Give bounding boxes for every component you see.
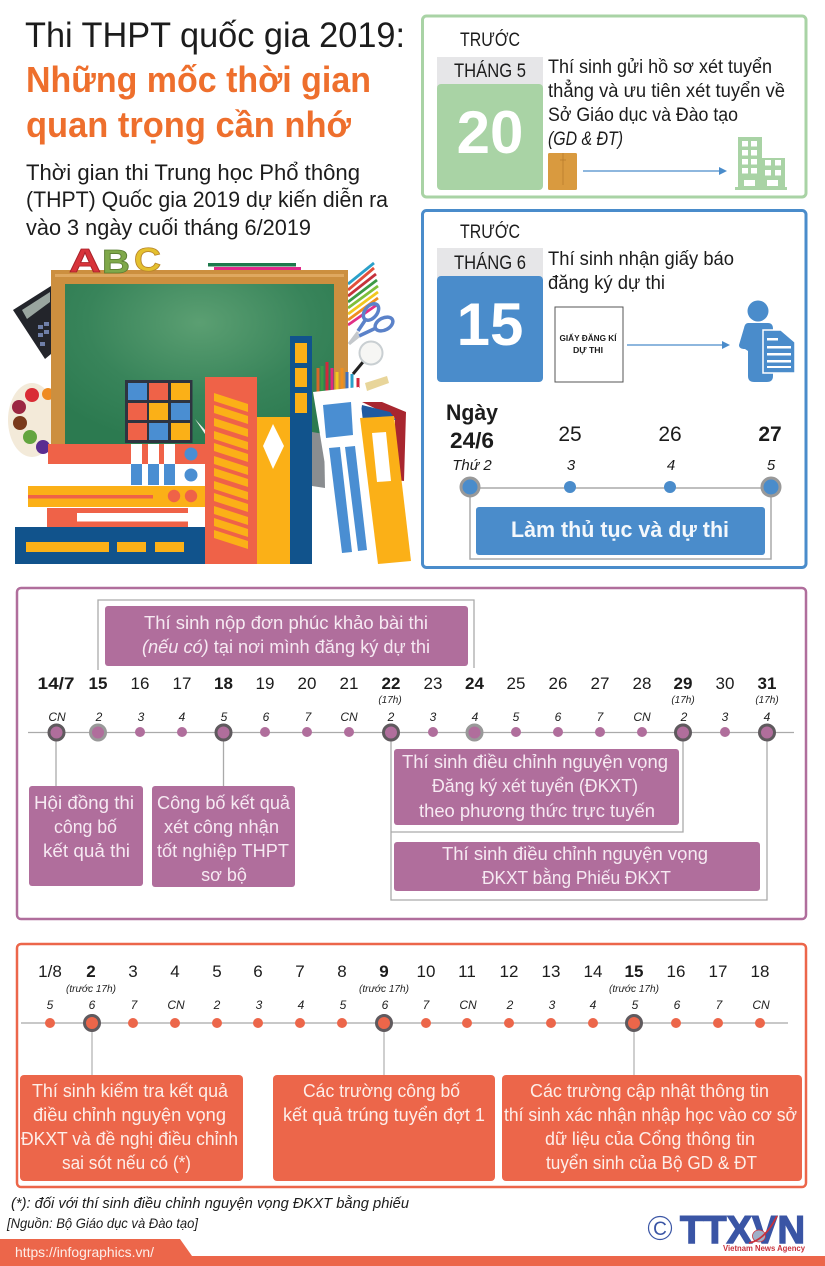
August weekdays: 3 xyxy=(256,998,263,1012)
dates 25 to 27: 5 xyxy=(767,457,776,474)
July weekdays: 6 xyxy=(263,710,270,724)
label: before: TRƯỚC xyxy=(460,29,520,51)
July dates: 26 xyxy=(549,674,567,693)
text: receive notice: Thí sinh nhận giấy báo xyxy=(548,249,734,270)
connector lines xyxy=(21,1023,788,1075)
August dates: 12 xyxy=(500,962,518,981)
July weekdays: 2 xyxy=(95,710,103,724)
July weekdays: 3 xyxy=(138,710,145,724)
books lying flat xyxy=(15,444,205,564)
icon: coloured pencils xyxy=(348,263,378,325)
August weekdays: 6 xyxy=(674,998,681,1012)
date: 24/6: Thứ 2 xyxy=(452,457,492,474)
icon: colour cube xyxy=(125,380,192,443)
callout: paper form adjustment: ĐKXT bằng Phiếu ĐKXT xyxy=(482,867,671,888)
icon: magnifier xyxy=(353,342,382,374)
callout: preliminary graduation xyxy=(152,786,295,887)
callout: online adjustment: Đăng ký xét tuyển (ĐKXT) xyxy=(432,776,638,796)
icon: ABC letters: A xyxy=(69,242,101,279)
blackboard xyxy=(51,270,348,460)
callout: check adjustment results: ĐKXT và đề nghị điều chỉnh xyxy=(21,1129,238,1149)
July weekdays xyxy=(48,710,771,724)
callout: review request: (nếu có) tại nơi mình đăng ký dự thi xyxy=(142,637,430,657)
exam days timeline xyxy=(446,400,782,559)
August weekdays: CN xyxy=(752,998,770,1012)
footer band with URL: https://infographics.vn/ xyxy=(15,1244,154,1260)
July dates: (17h) xyxy=(378,695,402,706)
July dates: 18 xyxy=(214,674,233,693)
August weekdays: 5 xyxy=(340,998,347,1012)
July weekdays: 7 xyxy=(597,710,605,724)
upright books xyxy=(205,336,312,564)
dates 25 to 27: 27 xyxy=(758,423,782,446)
date tile: 15 June: THÁNG 6 xyxy=(454,253,526,274)
July weekdays: 4 xyxy=(179,710,186,724)
icon: ruler xyxy=(365,376,389,391)
August weekdays: 5 xyxy=(632,998,639,1012)
orange headline: quan trọng cần nhớ xyxy=(26,104,351,145)
July dates: 16 xyxy=(131,674,149,693)
July weekdays: CN xyxy=(48,710,66,724)
August dates: 16 xyxy=(667,962,685,981)
July weekdays: 2 xyxy=(680,710,688,724)
July dates xyxy=(38,674,779,706)
August weekdays: 6 xyxy=(89,998,96,1012)
date: 24/6: Ngày xyxy=(446,400,499,425)
callout: exam procedure xyxy=(476,507,765,555)
August dates: 9 xyxy=(379,962,389,981)
text: receive notice: đăng ký dự thi xyxy=(548,273,665,294)
August weekdays: 6 xyxy=(382,998,389,1012)
August timeline dots xyxy=(45,1016,765,1030)
August weekdays xyxy=(47,998,770,1012)
title block xyxy=(25,16,405,240)
callout: online adjustment xyxy=(394,749,679,825)
August weekdays: 2 xyxy=(213,998,221,1012)
text: send application: Thí sinh gửi hồ sơ xét tuyển xyxy=(548,57,772,78)
text: send application xyxy=(548,57,785,150)
date: 24/6 xyxy=(446,400,499,474)
August dates xyxy=(38,962,769,995)
July weekdays: 7 xyxy=(305,710,313,724)
July weekdays: 4 xyxy=(764,710,771,724)
callout: round 1 results xyxy=(273,1075,495,1181)
callout: preliminary graduation: sơ bộ xyxy=(201,865,247,885)
July weekdays: CN xyxy=(340,710,358,724)
intro text: Thời gian thi Trung học Phổ thông xyxy=(26,160,360,185)
title line: Thi THPT quốc gia 2019: xyxy=(25,16,405,55)
callout: check adjustment results: điều chỉnh nguyện vọng xyxy=(33,1105,226,1125)
icon: stacked books behind xyxy=(312,402,406,488)
icon: paint palette xyxy=(8,383,56,457)
August weekdays: 7 xyxy=(716,998,724,1012)
July weekdays: 3 xyxy=(430,710,437,724)
July dates: 14/7 xyxy=(38,674,74,693)
orange headline: Những mốc thời gian xyxy=(26,59,371,100)
August weekdays: 7 xyxy=(131,998,139,1012)
August weekdays: CN xyxy=(167,998,185,1012)
July timeline dots xyxy=(49,725,774,740)
July weekdays: 4 xyxy=(472,710,479,724)
July dates: 15 xyxy=(89,674,107,693)
text: send application: Sở Giáo dục và Đào tạo xyxy=(548,105,738,126)
icon: registration paper xyxy=(555,307,623,382)
August dates: (trước 17h) xyxy=(609,984,659,995)
orange headline xyxy=(26,59,371,145)
August dates: 15 xyxy=(625,962,643,981)
panel: August timeline xyxy=(17,944,806,1187)
August weekdays: 5 xyxy=(47,998,54,1012)
July dates: 28 xyxy=(633,674,651,693)
August dates: 2 xyxy=(86,962,96,981)
logo: TTXVN: C xyxy=(653,1219,667,1240)
July dates: 21 xyxy=(340,674,358,693)
icon: pencil cup xyxy=(318,362,358,392)
July dates: 24 xyxy=(465,674,484,693)
callout: review request xyxy=(105,606,468,666)
August weekdays: CN xyxy=(459,998,477,1012)
August dates: 7 xyxy=(295,962,305,981)
panel: before May 20 xyxy=(422,16,806,197)
intro text: (THPT) Quốc gia 2019 dự kiến diễn ra xyxy=(26,187,389,212)
August dates: 10 xyxy=(417,962,435,981)
icon: building xyxy=(735,137,787,190)
July dates: 22 xyxy=(382,674,400,693)
arrow xyxy=(627,341,730,349)
dates 25 to 27: 3 xyxy=(567,457,576,474)
July dates: 30 xyxy=(716,674,734,693)
text: send application: thẳng và ưu tiên xét tuyển về xyxy=(548,80,785,102)
August weekdays: 4 xyxy=(590,998,597,1012)
text: send application: (GD & ĐT) xyxy=(548,129,623,150)
July weekdays: 5 xyxy=(513,710,520,724)
timeline dots xyxy=(461,478,780,496)
callout: round 1 results: kết quả trúng tuyển đợt 1 xyxy=(283,1105,485,1125)
callout: paper form adjustment xyxy=(394,842,760,891)
callout: round 1 results: Các trường công bố xyxy=(303,1081,460,1101)
August dates: 11 xyxy=(458,962,476,981)
icon: envelope xyxy=(548,153,577,190)
dates 25 to 27: 25 xyxy=(558,423,582,446)
label: before: TRƯỚC xyxy=(460,221,520,243)
connector lines xyxy=(28,600,794,900)
callout: paper form adjustment: Thí sinh điều chỉnh nguyện vọng xyxy=(442,844,708,864)
callout: results announced: công bố xyxy=(54,817,117,837)
July weekdays: 5 xyxy=(221,710,228,724)
panel: July timeline xyxy=(17,588,806,919)
July dates: (17h) xyxy=(671,695,695,706)
logo: TTXVN: TTXVN xyxy=(680,1209,805,1252)
July weekdays: CN xyxy=(633,710,651,724)
July dates: 25 xyxy=(507,674,525,693)
leaning books xyxy=(313,387,411,564)
callout: check adjustment results xyxy=(20,1075,243,1181)
callout: results announced: kết quả thi xyxy=(43,841,130,861)
July dates: 17 xyxy=(173,674,191,693)
callout: exam procedure: Làm thủ tục và dự thi xyxy=(511,517,729,542)
July dates: 31 xyxy=(758,674,776,693)
source: [Nguồn: Bộ Giáo dục và Đào tạo] xyxy=(6,1215,199,1231)
July dates: 19 xyxy=(256,674,274,693)
dates 25 to 27: 26 xyxy=(658,423,682,446)
July weekdays: 6 xyxy=(555,710,562,724)
callout: check adjustment results: sai sót nếu có (*) xyxy=(62,1153,191,1173)
callout: update admissions data: thí sinh xác nhận nhập học vào cơ sở xyxy=(504,1105,797,1125)
date tile: 20 May xyxy=(437,57,543,190)
date tile: 15 June: 15 xyxy=(457,291,523,358)
icon: calculator xyxy=(13,286,51,359)
July dates: 29 xyxy=(674,674,692,693)
August weekdays: 7 xyxy=(423,998,431,1012)
icon: person with document xyxy=(739,300,795,382)
July dates: 20 xyxy=(298,674,316,693)
intro text xyxy=(26,160,389,240)
callout: results announced xyxy=(29,786,143,886)
callout: results announced: Hội đồng thi xyxy=(34,793,134,813)
August dates: 1/8 xyxy=(38,962,62,981)
July dates: 27 xyxy=(591,674,609,693)
callout: online adjustment: Thí sinh điều chỉnh nguyện vọng xyxy=(402,752,668,772)
illustration: blackboard, books and school supplies xyxy=(8,241,411,564)
date tile: 20 May: 20 xyxy=(457,99,523,166)
icon: ABC letters xyxy=(69,241,161,280)
July dates: (17h) xyxy=(755,695,779,706)
callout: preliminary graduation: tốt nghiệp THPT xyxy=(157,841,289,861)
callout: preliminary graduation: xét công nhận xyxy=(164,817,279,837)
callout: update admissions data xyxy=(502,1075,802,1181)
August dates: 4 xyxy=(170,962,180,981)
icon: ABC letters: B xyxy=(102,243,130,280)
panel: before June 15 and exam days xyxy=(422,210,806,568)
August weekdays: 4 xyxy=(298,998,305,1012)
date tile: 20 May: THÁNG 5 xyxy=(454,61,526,82)
arrow xyxy=(583,167,727,175)
icon: registration paper: DỰ THI xyxy=(573,346,603,355)
callout: update admissions data: dữ liệu của Cổng thông tin xyxy=(545,1129,755,1149)
August dates: 6 xyxy=(253,962,263,981)
dates 25 to 27: 4 xyxy=(667,457,675,474)
August dates: 8 xyxy=(337,962,347,981)
dates 25 to 27 xyxy=(558,423,782,474)
date: 24/6: 24/6 xyxy=(450,428,494,453)
callout: update admissions data: tuyển sinh của Bộ GD & ĐT xyxy=(546,1153,757,1173)
callout: online adjustment: theo phương thức trực tuyến xyxy=(419,801,655,821)
August dates: (trước 17h) xyxy=(66,984,116,995)
August weekdays: 3 xyxy=(549,998,556,1012)
callout: preliminary graduation: Công bố kết quả xyxy=(157,793,291,813)
July dates: 23 xyxy=(424,674,442,693)
August dates: 13 xyxy=(542,962,560,981)
August dates: 3 xyxy=(128,962,138,981)
callout: check adjustment results: Thí sinh kiểm tra kết quả xyxy=(32,1081,229,1101)
August dates: (trước 17h) xyxy=(359,984,409,995)
August dates: 14 xyxy=(584,962,602,981)
August dates: 18 xyxy=(751,962,769,981)
callout: update admissions data: Các trường cập nhật thông tin xyxy=(530,1081,769,1101)
callout: review request: Thí sinh nộp đơn phúc khảo bài thi xyxy=(144,613,428,633)
icon: registration paper: GIẤY ĐĂNG KÍ xyxy=(560,333,617,343)
July weekdays: 2 xyxy=(387,710,395,724)
August dates: 5 xyxy=(212,962,222,981)
text: receive notice xyxy=(548,249,734,294)
August weekdays: 2 xyxy=(506,998,514,1012)
icon: chalk xyxy=(195,419,205,434)
logo: TTXVN: Vietnam News Agency xyxy=(723,1244,806,1253)
footnote: (*): đối với thí sinh điều chỉnh nguyện vọng ĐKXT bằng phiếu xyxy=(11,1195,410,1212)
footer band with URL xyxy=(0,1239,825,1266)
July weekdays: 3 xyxy=(722,710,729,724)
date tile: 15 June xyxy=(437,248,543,382)
icon: scissors xyxy=(349,301,395,344)
intro text: vào 3 ngày cuối tháng 6/2019 xyxy=(26,215,311,240)
August dates: 17 xyxy=(709,962,727,981)
icon: ABC letters: C xyxy=(134,241,161,278)
icon: pencils on board xyxy=(208,263,301,270)
